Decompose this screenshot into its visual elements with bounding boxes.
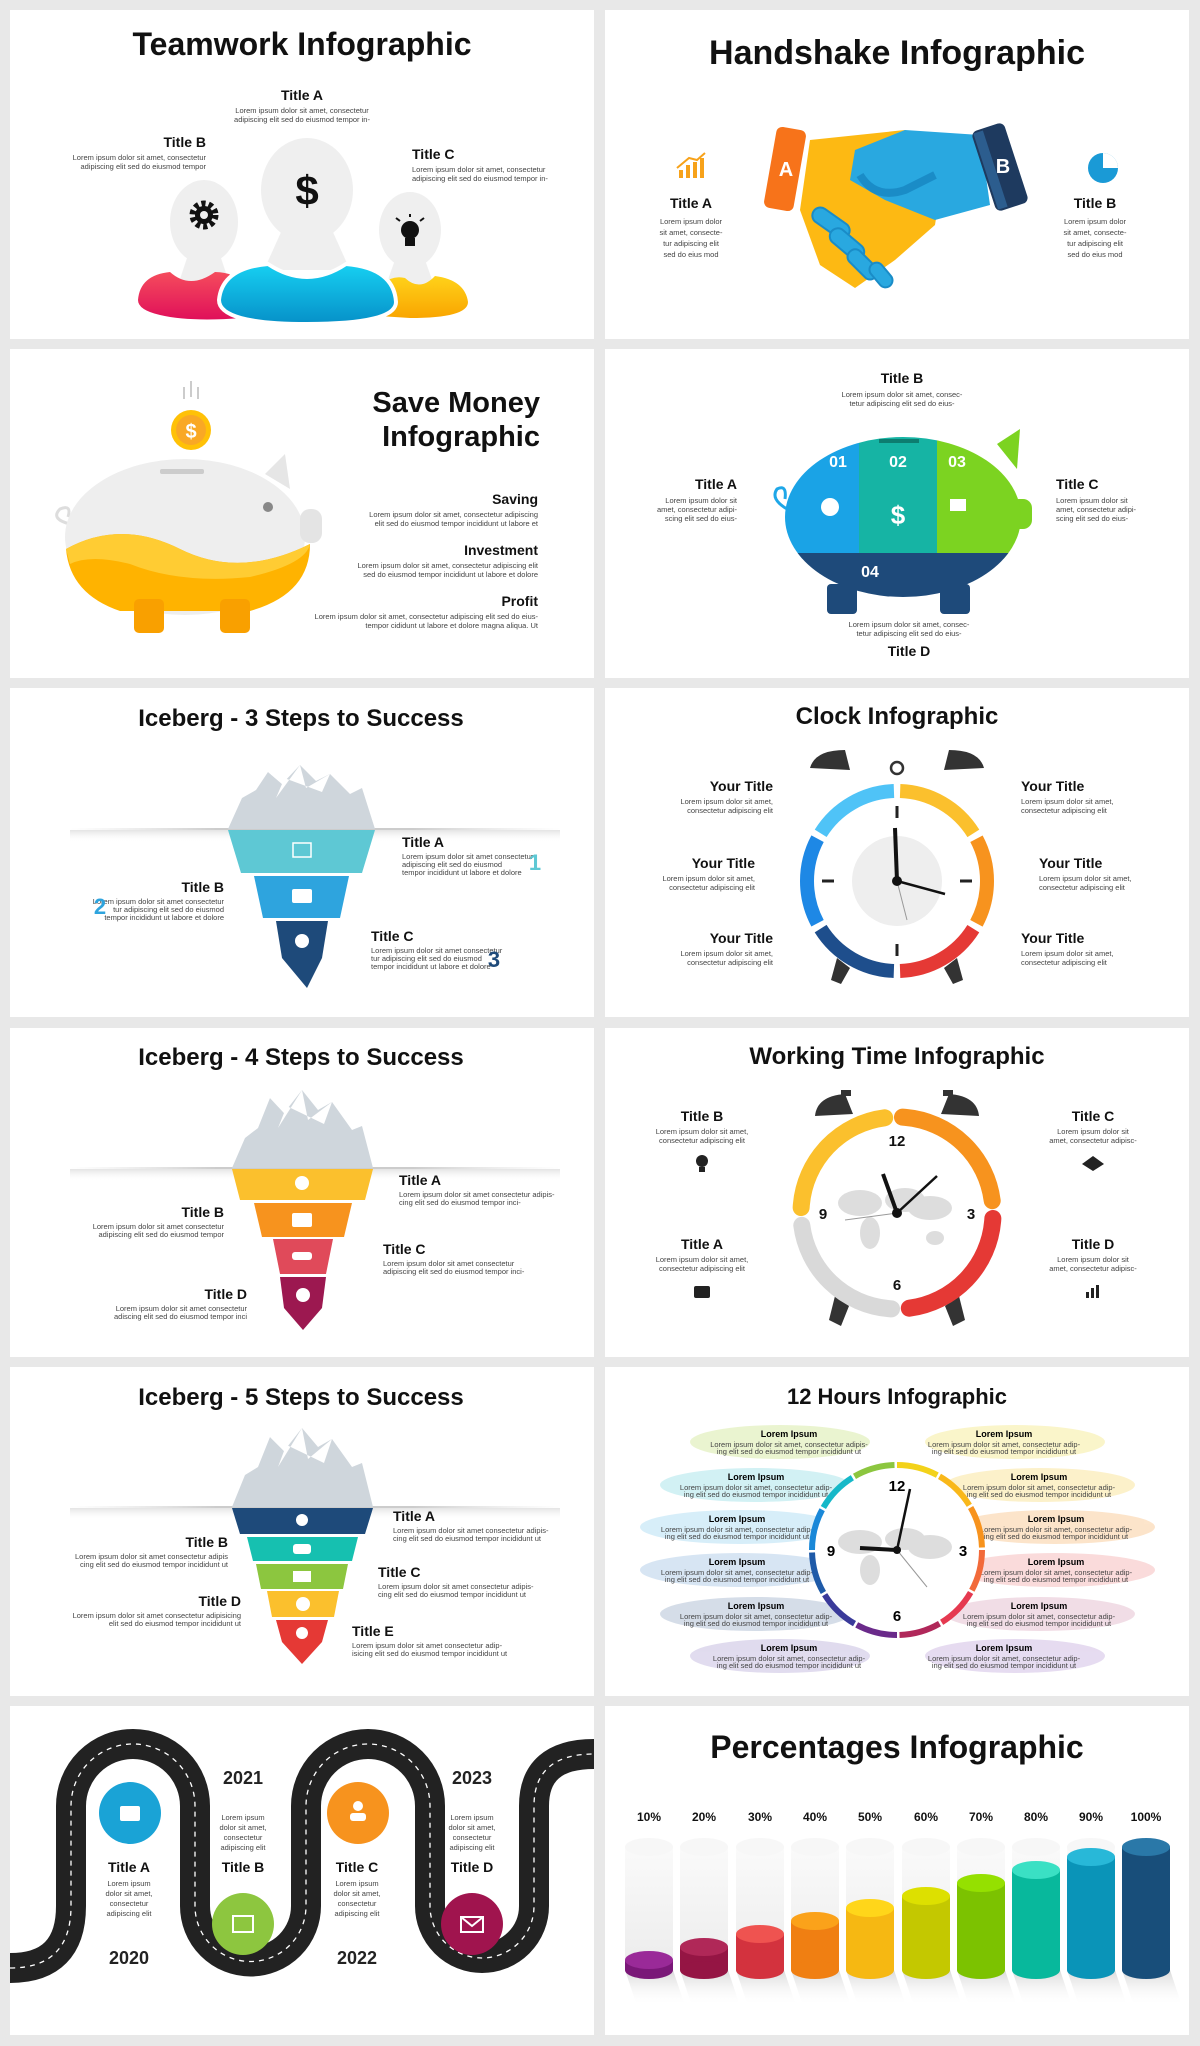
text: investment: Lorem ipsum dolor sit amet, consectetur adipiscing elit bbox=[358, 561, 539, 570]
cuff A bbox=[763, 126, 807, 212]
panel: working time bbox=[605, 1028, 1189, 1357]
text: title A: scing elit sed do eius- bbox=[665, 514, 737, 523]
handshake bbox=[763, 122, 1029, 290]
text: title A bbox=[402, 834, 541, 877]
milestone C bbox=[327, 1782, 389, 1918]
person A bbox=[219, 138, 396, 324]
clock: 6 bbox=[893, 1608, 901, 1625]
text: left titles: Your Title bbox=[710, 778, 773, 794]
text: title A: Title A bbox=[402, 834, 444, 850]
labels right: Lorem ipsum dolor sit amet, consectetur adip- bbox=[963, 1612, 1116, 1621]
cylinder chart bbox=[625, 1838, 1182, 2006]
text: title C: tur adipiscing elit sed do eiusmod bbox=[371, 954, 482, 963]
text: saving: elit sed do eiusmod tempor incididunt ut labore et bbox=[375, 519, 539, 528]
alarm clock bbox=[793, 1090, 1001, 1326]
text: title B: tetur adipiscing elit sed do eius- bbox=[849, 399, 955, 408]
text: title E: isicing elit sed do eiusmod tempor incididunt ut bbox=[352, 1649, 508, 1658]
text: title A: sit amet, consecte- bbox=[660, 228, 723, 237]
milestone B: adipiscing elit bbox=[220, 1843, 266, 1852]
year labels: 2020 bbox=[109, 1948, 149, 1968]
labels right: Lorem Ipsum bbox=[976, 1429, 1032, 1439]
labels right: ing elit sed do eiusmod tempor incididunt ut bbox=[932, 1661, 1077, 1670]
labels left: Lorem ipsum dolor sit amet, consectetur adip- bbox=[661, 1568, 814, 1577]
title: Handshake Infographic bbox=[709, 34, 1085, 72]
title: Infographic bbox=[382, 421, 540, 453]
text: title B bbox=[656, 1108, 748, 1172]
text: saving bbox=[369, 491, 539, 528]
water line bbox=[70, 1167, 560, 1181]
panel: piggy puzzle bbox=[605, 349, 1189, 678]
piggy puzzle bbox=[775, 429, 1032, 614]
text: title D: Title D bbox=[198, 1593, 241, 1609]
icon: bulb bbox=[396, 214, 424, 246]
icon: pie bbox=[1088, 153, 1118, 183]
year labels bbox=[109, 1768, 492, 1968]
text: title B: 2 bbox=[94, 894, 106, 919]
title: Iceberg - 4 Steps to Success bbox=[138, 1044, 464, 1071]
milestone D: consectetur bbox=[453, 1833, 492, 1842]
text: title A: Title A bbox=[281, 87, 323, 103]
text: title A bbox=[393, 1508, 549, 1543]
text: investment: Investment bbox=[464, 542, 538, 558]
title: Clock Infographic bbox=[796, 703, 998, 730]
labels right: Lorem ipsum dolor sit amet, consectetur adip- bbox=[928, 1440, 1081, 1449]
text: right titles: Lorem ipsum dolor sit amet, bbox=[1021, 797, 1114, 806]
milestone D: Title D bbox=[451, 1859, 493, 1875]
text: title B: Title B bbox=[181, 879, 224, 895]
text: title A: adipiscing elit sed do eiusmod tempor in- bbox=[234, 115, 370, 124]
text: title C bbox=[1049, 1108, 1137, 1171]
text: right titles: Lorem ipsum dolor sit amet, bbox=[1021, 949, 1114, 958]
labels right: Lorem Ipsum bbox=[1011, 1472, 1067, 1482]
text: title C: Lorem ipsum dolor sit amet consectetur bbox=[371, 946, 503, 955]
labels left: ing elit sed do eiusmod tempor incididunt ut bbox=[684, 1490, 829, 1499]
bar 50% bbox=[846, 1899, 894, 1979]
text: title A: Lorem ipsum dolor sit amet, consectetur bbox=[235, 106, 369, 115]
text: title B: Title B bbox=[163, 134, 206, 150]
bar 20% bbox=[680, 1938, 728, 1979]
text: title C bbox=[378, 1564, 534, 1599]
text: title C: amet, consectetur adipisc- bbox=[1049, 1136, 1137, 1145]
labels left: Lorem Ipsum bbox=[728, 1601, 784, 1611]
text: title D: amet, consectetur adipisc- bbox=[1049, 1264, 1137, 1273]
percentage labels: 100% bbox=[1131, 1810, 1162, 1824]
text: title C bbox=[383, 1241, 525, 1276]
labels left: Lorem Ipsum bbox=[728, 1472, 784, 1482]
labels right: Lorem ipsum dolor sit amet, consectetur adip- bbox=[980, 1525, 1133, 1534]
text: title C: Title C bbox=[371, 928, 414, 944]
text: title C: adipiscing elit sed do eiusmod tempor inci- bbox=[383, 1267, 525, 1276]
text: title D: Lorem ipsum dolor sit amet consectetur adipisicing bbox=[73, 1611, 241, 1620]
title: Iceberg - 3 Steps to Success bbox=[138, 705, 464, 732]
text: title A: tempor incididunt ut labore et dolore bbox=[402, 868, 522, 877]
milestone B: Lorem ipsum bbox=[221, 1813, 265, 1822]
title: Working Time Infographic bbox=[749, 1043, 1045, 1070]
milestone C: dolor sit amet, bbox=[333, 1889, 381, 1898]
text: right titles: Lorem ipsum dolor sit amet, bbox=[1039, 874, 1132, 883]
alarm clock: 3 bbox=[967, 1206, 975, 1223]
clock: 12 bbox=[889, 1478, 905, 1495]
title bbox=[372, 387, 540, 453]
text: title B: Title B bbox=[681, 1108, 723, 1124]
text: investment: sed do eiusmod tempor incididunt ut labore et dolore bbox=[363, 570, 538, 579]
text: left titles bbox=[662, 778, 774, 967]
text: title B: Lorem ipsum dolor sit amet consectetur bbox=[93, 1222, 224, 1231]
text: title A: 1 bbox=[529, 850, 541, 875]
text: title D: Title D bbox=[204, 1286, 247, 1302]
text: title A bbox=[234, 87, 370, 124]
panel: clock bbox=[605, 688, 1189, 1017]
labels right: Lorem Ipsum bbox=[1028, 1557, 1084, 1567]
text: title E bbox=[352, 1623, 508, 1658]
text: title B: Lorem ipsum dolor sit amet, consectetur bbox=[73, 153, 207, 162]
bar 80% bbox=[1012, 1861, 1060, 1979]
text: title A bbox=[656, 1236, 748, 1298]
text: title D: Lorem ipsum dolor sit bbox=[1057, 1255, 1130, 1264]
labels left bbox=[661, 1429, 868, 1670]
person C bbox=[375, 192, 468, 318]
text: title C: scing elit sed do eius- bbox=[1056, 514, 1129, 523]
text: title A: Title A bbox=[399, 1172, 441, 1188]
text: title C: Title C bbox=[412, 146, 455, 162]
panel: iceberg 4 bbox=[10, 1028, 594, 1357]
text: title A: sed do eius mod bbox=[663, 250, 719, 259]
bar 100% bbox=[1122, 1838, 1170, 1979]
text: title D: adiscing elit sed do eiusmod tempor inci bbox=[114, 1312, 247, 1321]
text: title A: Title A bbox=[681, 1236, 723, 1252]
text: left titles: consectetur adipiscing elit bbox=[669, 883, 756, 892]
milestone D bbox=[441, 1813, 503, 1955]
text: title C: Lorem ipsum dolor sit amet, consectetur bbox=[412, 165, 546, 174]
text: title B: Lorem ipsum dolor bbox=[1064, 217, 1127, 226]
labels left: Lorem Ipsum bbox=[709, 1514, 765, 1524]
text: title D: Lorem ipsum dolor sit amet, consec- bbox=[849, 620, 970, 629]
text: title A: Title A bbox=[393, 1508, 435, 1524]
text: title C: adipiscing elit sed do eiusmod tempor in- bbox=[412, 174, 548, 183]
percentage labels: 10% bbox=[637, 1810, 661, 1824]
panel: save money bbox=[10, 349, 594, 678]
title: Percentages Infographic bbox=[710, 1729, 1084, 1765]
percentage labels: 60% bbox=[914, 1810, 938, 1824]
cuff B: B bbox=[996, 156, 1010, 178]
text: right titles: Your Title bbox=[1021, 778, 1084, 794]
clock: 9 bbox=[827, 1543, 835, 1560]
text: title B: consectetur adipiscing elit bbox=[659, 1136, 746, 1145]
milestone D: adipiscing elit bbox=[449, 1843, 495, 1852]
text: title D bbox=[1049, 1236, 1137, 1298]
text: title B bbox=[73, 134, 207, 171]
labels left: ing elit sed do eiusmod tempor incididunt ut bbox=[684, 1619, 829, 1628]
percentage labels: 50% bbox=[858, 1810, 882, 1824]
milestone D: Lorem ipsum bbox=[450, 1813, 494, 1822]
milestone B: consectetur bbox=[224, 1833, 263, 1842]
text: title A bbox=[399, 1172, 555, 1207]
text: title A: cing elit sed do eiusmod tempor inci- bbox=[399, 1198, 521, 1207]
bar 70% bbox=[957, 1874, 1005, 1979]
labels right: ing elit sed do eiusmod tempor incididunt ut bbox=[984, 1575, 1129, 1584]
text: title B: adipiscing elit sed do eiusmod tempor bbox=[98, 1230, 224, 1239]
percentage labels: 70% bbox=[969, 1810, 993, 1824]
text: title C: Title C bbox=[378, 1564, 421, 1580]
clock: 3 bbox=[959, 1543, 967, 1560]
labels right: Lorem ipsum dolor sit amet, consectetur adip- bbox=[928, 1654, 1081, 1663]
text: title A: Lorem ipsum dolor sit amet consectetur adipis- bbox=[399, 1190, 555, 1199]
text: title B: Lorem ipsum dolor sit amet, consec- bbox=[842, 390, 963, 399]
text: title C: Lorem ipsum dolor sit bbox=[1056, 496, 1129, 505]
text: title C: Lorem ipsum dolor sit amet consectetur bbox=[383, 1259, 515, 1268]
panel: iceberg 5 bbox=[10, 1367, 594, 1696]
milestone C: adipiscing elit bbox=[334, 1909, 380, 1918]
text: title B: tur adipiscing elit bbox=[1067, 239, 1124, 248]
icon: dollar: $ bbox=[295, 167, 319, 214]
text: title A: Lorem ipsum dolor sit amet consectetur adipis- bbox=[393, 1526, 549, 1535]
milestone D: dolor sit amet, bbox=[448, 1823, 496, 1832]
piggy puzzle: 03 bbox=[948, 454, 966, 471]
text: title C: 3 bbox=[488, 947, 500, 972]
text: title B bbox=[75, 1534, 229, 1569]
labels right: Lorem Ipsum bbox=[976, 1643, 1032, 1653]
text: profit: tempor cididunt ut labore et dolore magna aliqua. Ut bbox=[365, 621, 539, 630]
text: title B: tempor incididunt ut labore et dolore bbox=[104, 913, 224, 922]
text: right titles: Your Title bbox=[1039, 855, 1102, 871]
text: right titles: Your Title bbox=[1021, 930, 1084, 946]
text: title A: adipiscing elit sed do eiusmod bbox=[402, 860, 502, 869]
text: title B: Title B bbox=[185, 1534, 228, 1550]
text: left titles: Lorem ipsum dolor sit amet, bbox=[680, 949, 773, 958]
title: 12 Hours Infographic bbox=[787, 1384, 1007, 1409]
text: title D: elit sed do eiusmod tempor incididunt ut bbox=[109, 1619, 242, 1628]
text: title A: cing elit sed do eiusmod tempor incididunt ut bbox=[393, 1534, 542, 1543]
text: title B bbox=[93, 1204, 224, 1239]
text: title C bbox=[1056, 476, 1137, 523]
percentage labels: 40% bbox=[803, 1810, 827, 1824]
text: title B: Title B bbox=[181, 1204, 224, 1220]
text: title B: Lorem ipsum dolor sit amet consectetur bbox=[93, 897, 224, 906]
panel: handshake bbox=[605, 10, 1189, 339]
text: saving: Lorem ipsum dolor sit amet, consectetur adipiscing bbox=[369, 510, 538, 519]
text: right titles: consectetur adipiscing elit bbox=[1021, 958, 1108, 967]
icon: gear bbox=[193, 204, 215, 226]
text: title D: Lorem ipsum dolor sit amet consectetur bbox=[116, 1304, 247, 1313]
labels left: Lorem ipsum dolor sit amet, consectetur adip- bbox=[680, 1612, 833, 1621]
text: title B: Title B bbox=[881, 370, 923, 386]
text: profit: Lorem ipsum dolor sit amet, consectetur adipiscing elit sed do eius- bbox=[315, 612, 538, 621]
text: left titles: Your Title bbox=[692, 855, 755, 871]
text: title D bbox=[114, 1286, 247, 1321]
labels left: Lorem Ipsum bbox=[761, 1429, 817, 1439]
text: left titles: Lorem ipsum dolor sit amet, bbox=[680, 797, 773, 806]
text: title B: Lorem ipsum dolor sit amet, bbox=[656, 1127, 748, 1136]
milestone A: adipiscing elit bbox=[106, 1909, 152, 1918]
bar 30% bbox=[736, 1925, 784, 1979]
piggy puzzle: $ bbox=[891, 500, 906, 530]
title: Iceberg - 5 Steps to Success bbox=[138, 1384, 464, 1411]
milestone A: Lorem ipsum bbox=[107, 1879, 151, 1888]
labels left: Lorem ipsum dolor sit amet, consectetur adip- bbox=[661, 1525, 814, 1534]
text: title B bbox=[842, 370, 963, 408]
title: Save Money bbox=[372, 387, 540, 419]
text: right titles: consectetur adipiscing elit bbox=[1021, 806, 1108, 815]
labels right: ing elit sed do eiusmod tempor incididunt ut bbox=[967, 1619, 1112, 1628]
milestone A: consectetur bbox=[110, 1899, 149, 1908]
labels left: ing elit sed do eiusmod tempor incididunt ut bbox=[665, 1532, 810, 1541]
text: title E: Title E bbox=[352, 1623, 394, 1639]
text: title B: Lorem ipsum dolor sit amet consectetur adipis bbox=[75, 1552, 228, 1561]
text: title A bbox=[657, 476, 738, 523]
iceberg bbox=[228, 765, 375, 988]
milestone C: Lorem ipsum bbox=[335, 1879, 379, 1888]
text: title B: cing elit sed do eiusmod tempor incididunt ut bbox=[80, 1560, 229, 1569]
text: title D bbox=[849, 620, 970, 659]
alarm clock bbox=[773, 750, 1021, 1005]
year labels: 2021 bbox=[223, 1768, 263, 1788]
labels right: Lorem Ipsum bbox=[1011, 1601, 1067, 1611]
panel: 12 hours bbox=[605, 1367, 1189, 1696]
cuff B bbox=[971, 122, 1029, 212]
text: title A bbox=[660, 195, 723, 259]
percentage labels: 20% bbox=[692, 1810, 716, 1824]
bar 90% bbox=[1067, 1848, 1115, 1979]
bar 10% bbox=[625, 1951, 673, 1979]
text: title C: Lorem ipsum dolor sit bbox=[1057, 1127, 1130, 1136]
text: title C bbox=[412, 146, 548, 183]
text: right titles: consectetur adipiscing elit bbox=[1039, 883, 1126, 892]
icon: coin bbox=[171, 381, 211, 450]
petals left bbox=[640, 1425, 870, 1673]
milestone B: Title B bbox=[222, 1859, 264, 1875]
alarm clock: 6 bbox=[893, 1277, 901, 1294]
text: title C: tempor incididunt ut labore et dolore bbox=[371, 962, 491, 971]
alarm clock: 9 bbox=[819, 1206, 827, 1223]
labels right: Lorem ipsum dolor sit amet, consectetur adip- bbox=[980, 1568, 1133, 1577]
labels right bbox=[928, 1429, 1133, 1670]
text: title C: Title C bbox=[1056, 476, 1099, 492]
cuff A: A bbox=[779, 159, 793, 181]
text: title B: adipiscing elit sed do eiusmod tempor bbox=[80, 162, 206, 171]
text: title B bbox=[93, 879, 224, 922]
bar 40% bbox=[791, 1912, 839, 1979]
title: Teamwork Infographic bbox=[132, 26, 472, 62]
milestone C: consectetur bbox=[338, 1899, 377, 1908]
clock bbox=[781, 1434, 1013, 1666]
piggy puzzle: 01 bbox=[829, 454, 847, 471]
text: investment bbox=[358, 542, 539, 579]
labels left: ing elit sed do eiusmod tempor incididunt ut bbox=[665, 1575, 810, 1584]
icon: bar chart bbox=[677, 153, 705, 178]
labels left: ing elit sed do eiusmod tempor incididunt ut bbox=[717, 1661, 862, 1670]
piggy bank bbox=[57, 454, 322, 633]
text: left titles: consectetur adipiscing elit bbox=[687, 958, 774, 967]
milestone B bbox=[212, 1813, 274, 1955]
text: title B: sed do eius mod bbox=[1067, 250, 1123, 259]
iceberg bbox=[232, 1090, 373, 1330]
text: left titles: Lorem ipsum dolor sit amet, bbox=[662, 874, 755, 883]
panel: percentages bbox=[605, 1706, 1189, 2035]
water line bbox=[70, 828, 560, 842]
labels left: Lorem Ipsum bbox=[709, 1557, 765, 1567]
labels right: ing elit sed do eiusmod tempor incididunt ut bbox=[967, 1490, 1112, 1499]
person B bbox=[138, 180, 242, 319]
piggy puzzle: 04 bbox=[861, 564, 879, 581]
iceberg bbox=[232, 1428, 373, 1664]
text: saving: Saving bbox=[492, 491, 538, 507]
text: title C: Lorem ipsum dolor sit amet consectetur adipis- bbox=[378, 1582, 534, 1591]
text: title D bbox=[73, 1593, 242, 1628]
text: title E: Lorem ipsum dolor sit amet consectetur adip- bbox=[352, 1641, 503, 1650]
text: left titles: consectetur adipiscing elit bbox=[687, 806, 774, 815]
labels left: Lorem Ipsum bbox=[761, 1643, 817, 1653]
text: title A: Lorem ipsum dolor sit amet consectetur bbox=[402, 852, 534, 861]
percentage labels: 30% bbox=[748, 1810, 772, 1824]
text: title A: Title A bbox=[695, 476, 737, 492]
text: title C: Title C bbox=[383, 1241, 426, 1257]
text: title A: amet, consectetur adipi- bbox=[657, 505, 737, 514]
text: title D: tetur adipiscing elit sed do eius- bbox=[856, 629, 962, 638]
text: title A: Title A bbox=[670, 195, 712, 211]
year labels: 2022 bbox=[337, 1948, 377, 1968]
panel: teamwork bbox=[10, 10, 594, 339]
text: title C: amet, consectetur adipi- bbox=[1056, 505, 1137, 514]
text: title A: Lorem ipsum dolor sit bbox=[665, 496, 738, 505]
text: title C: Title C bbox=[1072, 1108, 1114, 1124]
text: profit: Profit bbox=[501, 593, 538, 609]
road bbox=[10, 1744, 594, 1968]
labels right: Lorem Ipsum bbox=[1028, 1514, 1084, 1524]
percentage labels bbox=[637, 1810, 1162, 1824]
water line bbox=[70, 1506, 560, 1520]
text: profit bbox=[315, 593, 539, 630]
text: title C bbox=[371, 928, 503, 972]
labels left: ing elit sed do eiusmod tempor incididunt ut bbox=[717, 1447, 862, 1456]
panel: road timeline bbox=[10, 1706, 594, 2035]
alarm clock: 12 bbox=[889, 1133, 905, 1150]
petals right bbox=[925, 1425, 1155, 1673]
piggy puzzle: 02 bbox=[889, 454, 907, 471]
milestone A: dolor sit amet, bbox=[105, 1889, 153, 1898]
labels left: Lorem ipsum dolor sit amet, consectetur adip- bbox=[713, 1654, 866, 1663]
percentage labels: 80% bbox=[1024, 1810, 1048, 1824]
text: title D: Title D bbox=[1072, 1236, 1114, 1252]
text: title D: Title D bbox=[888, 643, 930, 659]
text: title B bbox=[1064, 195, 1127, 259]
milestone C: Title C bbox=[336, 1859, 378, 1875]
text: title B: tur adipiscing elit sed do eiusmod bbox=[113, 905, 224, 914]
percentage labels: 90% bbox=[1079, 1810, 1103, 1824]
text: title C: cing elit sed do eiusmod tempor incididunt ut bbox=[378, 1590, 527, 1599]
icon: coin: $ bbox=[185, 421, 197, 443]
text: title B: sit amet, consecte- bbox=[1064, 228, 1127, 237]
text: title A: Lorem ipsum dolor sit amet, bbox=[656, 1255, 748, 1264]
milestone A bbox=[99, 1782, 161, 1918]
milestone B: dolor sit amet, bbox=[219, 1823, 267, 1832]
panel: iceberg 3 bbox=[10, 688, 594, 1017]
labels right: Lorem ipsum dolor sit amet, consectetur adip- bbox=[963, 1483, 1116, 1492]
milestone A: Title A bbox=[108, 1859, 150, 1875]
year labels: 2023 bbox=[452, 1768, 492, 1788]
text: title B: Title B bbox=[1074, 195, 1116, 211]
text: title A: Lorem ipsum dolor bbox=[660, 217, 723, 226]
labels left: Lorem ipsum dolor sit amet, consectetur adip- bbox=[680, 1483, 833, 1492]
labels left: Lorem ipsum dolor sit amet, consectetur adipis- bbox=[710, 1440, 868, 1449]
bar 60% bbox=[902, 1887, 950, 1979]
labels right: ing elit sed do eiusmod tempor incididunt ut bbox=[984, 1532, 1129, 1541]
text: right titles bbox=[1021, 778, 1132, 967]
text: title A: consectetur adipiscing elit bbox=[659, 1264, 746, 1273]
text: title A: tur adipiscing elit bbox=[663, 239, 720, 248]
labels right: ing elit sed do eiusmod tempor incididunt ut bbox=[932, 1447, 1077, 1456]
text: left titles: Your Title bbox=[710, 930, 773, 946]
